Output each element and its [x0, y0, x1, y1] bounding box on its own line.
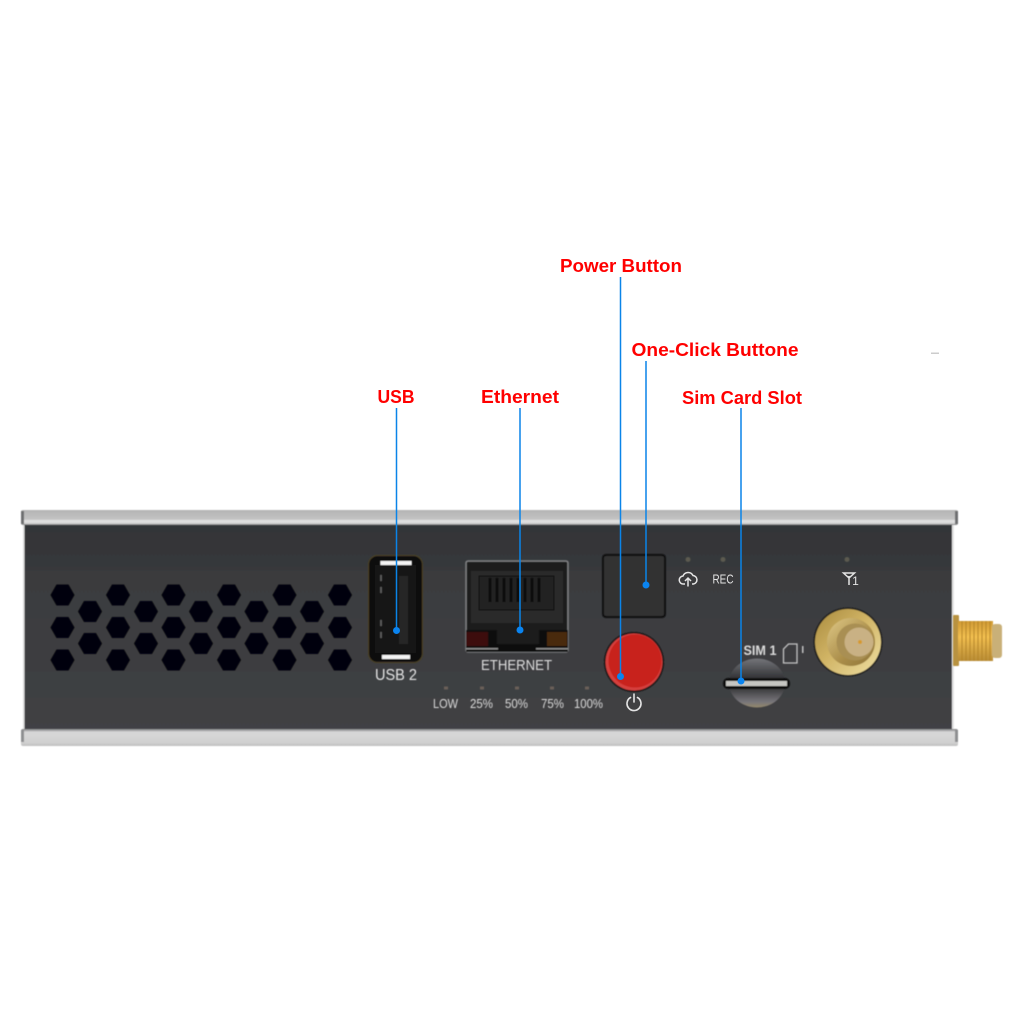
- signal level indicators: 100%: [574, 696, 603, 711]
- callout: USB: USB: [378, 387, 414, 407]
- vent holes: [50, 584, 352, 670]
- antenna connector front: [814, 608, 882, 676]
- signal level indicators: 75%: [541, 696, 564, 711]
- Ethernet port label: ETHERNET: [481, 657, 552, 674]
- panel: device body: [21, 510, 958, 746]
- Ethernet port: [466, 561, 568, 674]
- icon: antenna 1: [844, 573, 859, 588]
- SIM card slot: [723, 643, 804, 708]
- icon: SIM card: [784, 644, 797, 663]
- signal level indicators: 25%: [470, 696, 493, 711]
- callout: One-Click Buttone: [632, 340, 798, 588]
- signal level indicators: [433, 686, 603, 711]
- signal level indicators: LOW: [433, 696, 459, 711]
- antenna connector side: [953, 615, 1002, 666]
- REC label: REC: [712, 572, 734, 586]
- USB port: [368, 556, 422, 684]
- callout: One-Click Buttone: One-Click Buttone: [632, 340, 798, 360]
- callout: USB: [378, 387, 414, 634]
- callout: Power Button: [560, 256, 682, 680]
- callout: Power Button: Power Button: [560, 256, 682, 276]
- status LEDs: [686, 557, 850, 562]
- USB port label: USB 2: [375, 667, 417, 684]
- power button: [604, 632, 664, 692]
- icon: power symbol: [627, 694, 641, 711]
- one-click button: [603, 555, 665, 617]
- callout: Sim Card Slot: [682, 388, 802, 684]
- callout: Ethernet: [481, 387, 559, 634]
- callout: Ethernet: Ethernet: [481, 387, 559, 407]
- callout: Sim Card Slot: Sim Card Slot: [682, 388, 802, 408]
- icon: antenna 1: 1: [852, 574, 859, 588]
- icon: cloud upload: [679, 573, 697, 586]
- SIM label: SIM 1: [744, 643, 777, 658]
- signal level indicators: 50%: [505, 696, 528, 711]
